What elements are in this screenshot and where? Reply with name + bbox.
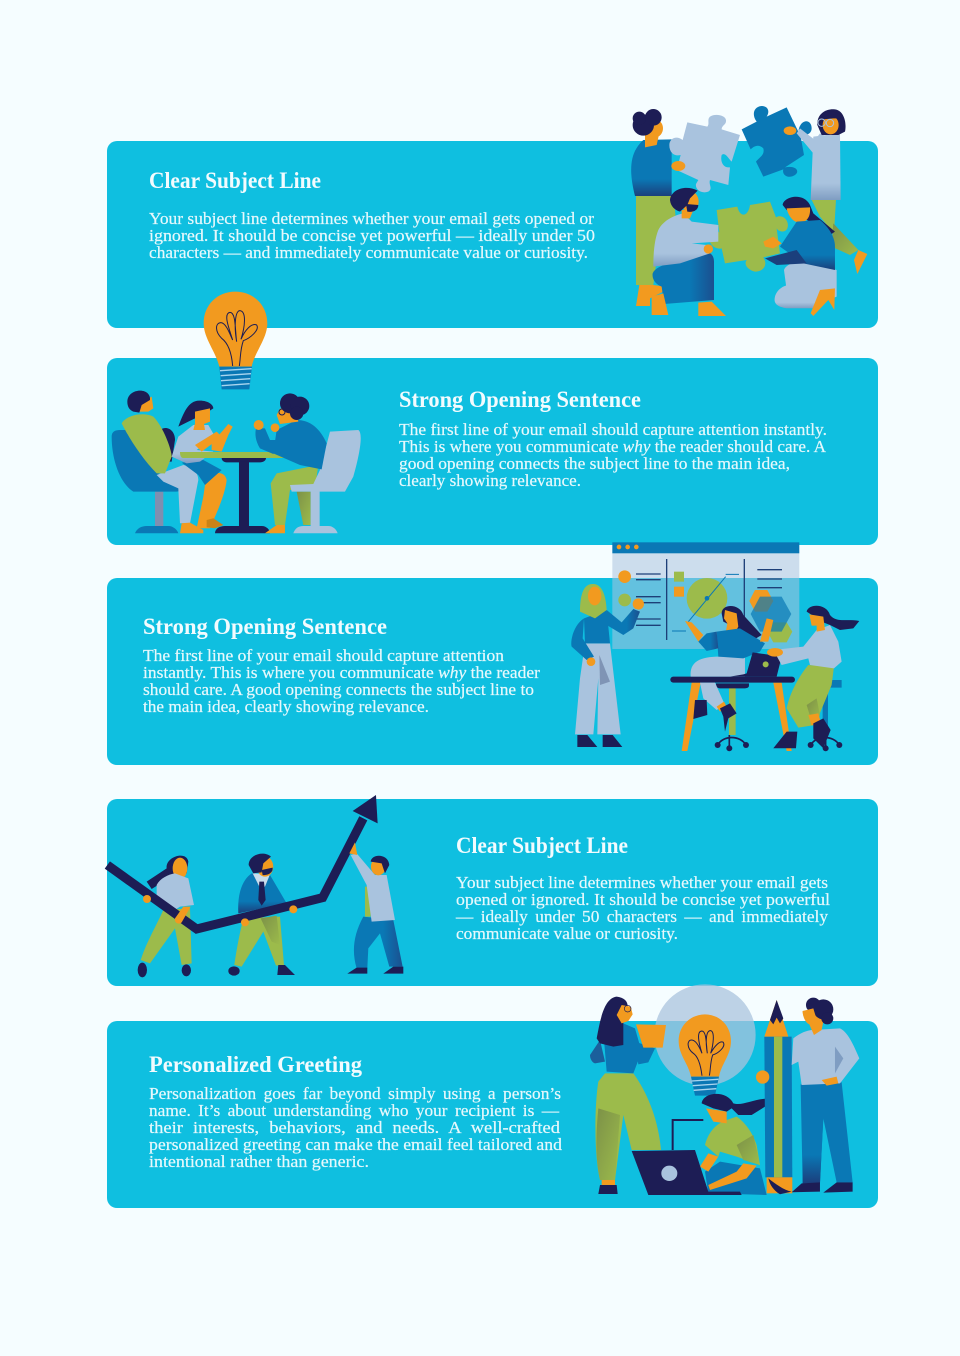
heading: Strong Opening Sentence bbox=[399, 387, 641, 412]
seated woman bbox=[685, 606, 782, 732]
illustration: creative team with bulb and pencil bbox=[590, 984, 859, 1195]
woman carrying arrow bbox=[138, 856, 194, 977]
man in suit bbox=[228, 854, 295, 976]
panel: clear subject line (fourth) bbox=[107, 795, 878, 986]
presentation board bbox=[612, 542, 799, 649]
heading: Clear Subject Line bbox=[456, 833, 628, 858]
body text bbox=[399, 420, 827, 490]
heading: Personalized Greeting bbox=[149, 1052, 362, 1077]
body text bbox=[149, 1084, 563, 1171]
heading: Strong Opening Sentence bbox=[143, 614, 387, 639]
card background bbox=[107, 141, 878, 328]
body text: good opening connects the subject line to the main idea, bbox=[399, 454, 790, 473]
illustration: team lifting growth arrow bbox=[107, 795, 403, 977]
panel: strong opening sentence (second) bbox=[107, 292, 878, 545]
standing woman bbox=[767, 606, 859, 748]
card background bbox=[107, 578, 878, 765]
body text: name. It’s about understanding who your recipient is — bbox=[149, 1101, 560, 1120]
seated woman with laptop bbox=[632, 1094, 773, 1195]
body text: clearly showing relevance. bbox=[399, 471, 581, 490]
body text bbox=[149, 209, 595, 262]
body text: intentional rather than generic. bbox=[149, 1152, 369, 1171]
stools bbox=[715, 680, 842, 751]
body text: Your subject line determines whether your email gets bbox=[456, 873, 828, 892]
woman in hijab bbox=[571, 584, 644, 747]
body text: personalized greeting can make the email feel tailored and bbox=[149, 1135, 563, 1154]
halo circle bbox=[654, 984, 756, 1086]
body text bbox=[455, 873, 830, 943]
illustration: team assembling puzzle bbox=[631, 106, 867, 316]
body text: This is where you communicate why the reader should care. A bbox=[399, 437, 827, 456]
body text: The first line of your email should capture attention bbox=[143, 646, 505, 665]
body text bbox=[143, 646, 540, 716]
body text: their interests, behaviors, and needs. A well-crafted bbox=[149, 1118, 561, 1137]
illustration: meeting at table under light bulb bbox=[112, 292, 361, 533]
growth arrow bbox=[107, 795, 378, 929]
body text: communicate value or curiosity. bbox=[456, 924, 678, 943]
body text: opened or ignored. It should be concise yet powerful bbox=[456, 890, 830, 909]
body text: ignored. It should be concise yet powerful — ideally under 50 bbox=[149, 226, 595, 245]
icon: light bulb bbox=[204, 292, 267, 389]
standing man bbox=[792, 998, 859, 1193]
heading: Clear Subject Line bbox=[149, 168, 321, 193]
man pushing arrow bbox=[347, 887, 403, 974]
body text: Your subject line determines whether your email gets opened or bbox=[149, 209, 594, 228]
card background bbox=[107, 799, 878, 986]
body text: instantly. This is where you communicate why the reader bbox=[143, 663, 540, 682]
body text: should care. A good opening connects the subject line to bbox=[143, 680, 534, 699]
card background bbox=[107, 358, 878, 545]
desk bbox=[670, 677, 795, 751]
panel: strong opening sentence (third) bbox=[107, 542, 878, 765]
body text: characters — and immediately communicate value or curiosity. bbox=[149, 243, 588, 262]
giant pencil bbox=[756, 1000, 792, 1194]
hands and arm on arrow bbox=[143, 842, 395, 926]
body text: Personalization goes far beyond simply using a person’s bbox=[149, 1084, 561, 1103]
illustration: team at presentation board bbox=[571, 542, 859, 751]
panel: clear subject line (top) bbox=[107, 106, 878, 328]
woman with book bbox=[590, 997, 666, 1194]
body text: the main idea, clearly showing relevance. bbox=[143, 697, 429, 716]
body text: The first line of your email should capture attention instantly. bbox=[399, 420, 827, 439]
card background bbox=[107, 1021, 878, 1208]
body text: — ideally under 50 characters — and immediately bbox=[455, 907, 828, 926]
panel: personalized greeting bbox=[107, 984, 878, 1208]
icon: light bulb bbox=[679, 1014, 731, 1096]
